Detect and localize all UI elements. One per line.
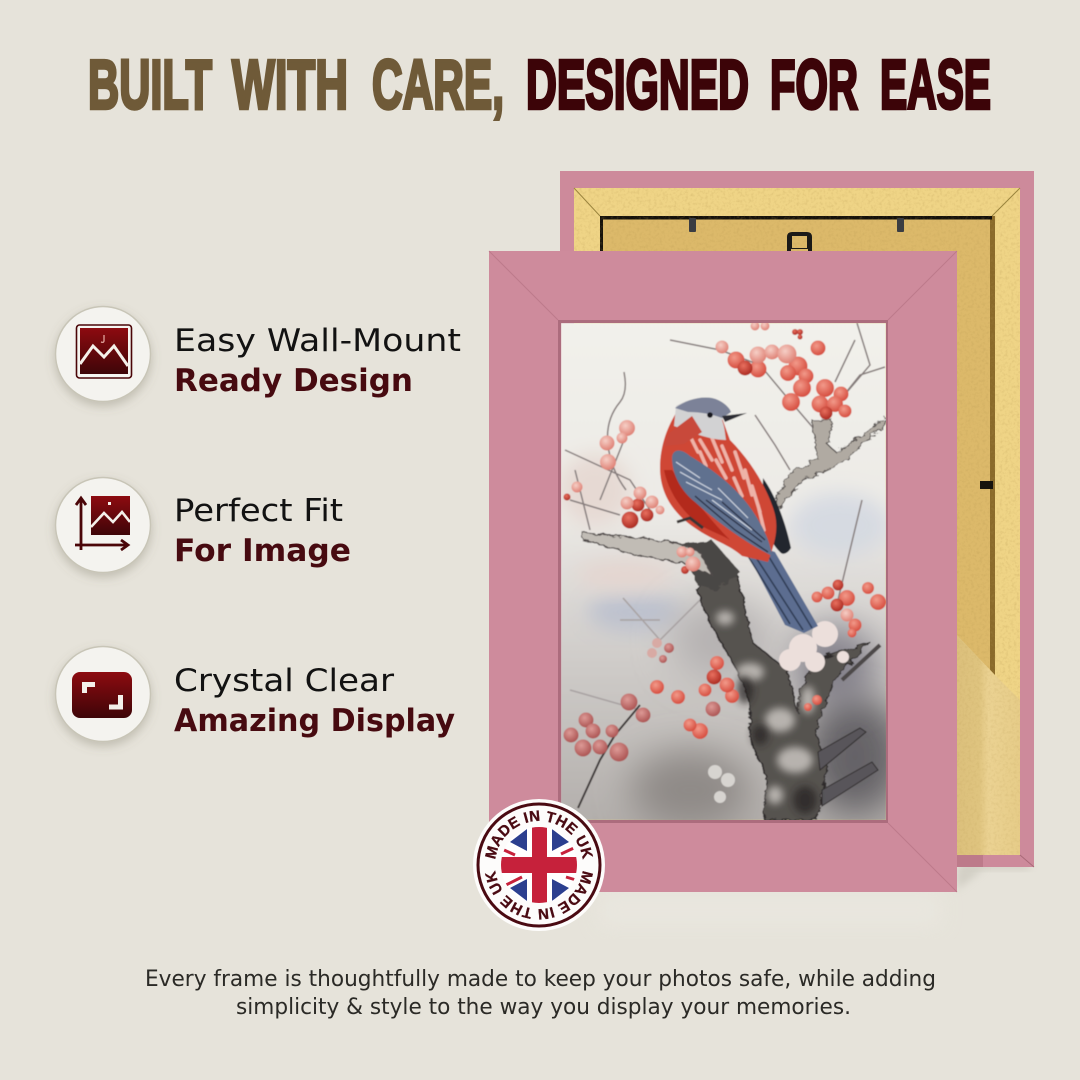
feature: crystal clear <box>56 646 455 742</box>
tree trunk and limbs <box>583 418 885 820</box>
icon: wall-mount picture <box>56 306 150 402</box>
mitre lines <box>489 251 957 892</box>
text: perfect fit <box>174 493 351 569</box>
text: perfect fit: Perfect Fit <box>174 493 343 529</box>
painting: bird on berry branch <box>559 322 905 830</box>
closing statement <box>145 966 936 1020</box>
text: crystal clear: Crystal Clear <box>174 663 394 699</box>
title: FOR <box>770 46 858 124</box>
text: easy wall-mount <box>174 323 461 399</box>
text: crystal clear: Amazing Display <box>174 703 455 739</box>
feature: perfect fit <box>56 478 351 572</box>
title: EASE <box>880 46 991 124</box>
closing statement: simplicity & style to the way you display your memories. <box>236 994 851 1020</box>
berries <box>564 322 886 762</box>
gold cardboard border <box>574 188 1020 855</box>
text: easy wall-mount: Easy Wall-Mount <box>174 323 461 359</box>
thin twigs <box>565 323 885 808</box>
union flag <box>500 826 578 904</box>
back of frame <box>560 171 1034 867</box>
badge text: MADE IN THE UK <box>485 810 594 860</box>
hanging tabs <box>689 218 904 232</box>
watercolour wash <box>559 323 905 830</box>
dark primaries <box>762 478 791 554</box>
back frame pink rim <box>560 171 1034 867</box>
title <box>88 46 991 124</box>
closing statement: Every frame is thoughtfully made to keep your photos safe, while adding <box>145 966 936 992</box>
icon: image with size arrows <box>56 478 150 572</box>
title: BUILT <box>88 46 212 124</box>
breast streaks <box>690 436 764 530</box>
tail <box>750 550 818 634</box>
badge: made in the UK <box>473 799 605 931</box>
title: WITH <box>232 46 348 124</box>
head <box>674 397 731 440</box>
title: DESIGNED <box>526 46 749 124</box>
icon: clear display <box>56 646 150 742</box>
text: easy wall-mount: Ready Design <box>174 363 413 399</box>
beak <box>722 413 747 422</box>
front frame <box>489 251 957 892</box>
backing board <box>600 216 992 686</box>
stand flap <box>957 635 1020 855</box>
pale blossoms <box>708 621 849 803</box>
hanger bracket <box>787 232 812 251</box>
text: perfect fit: For Image <box>174 533 351 569</box>
pink frame moulding <box>489 251 957 892</box>
floor shadow and reflection <box>600 862 1030 926</box>
bird claw <box>677 518 703 528</box>
inner lip <box>558 320 888 823</box>
badge: made in the UK: MADE IN THE UK <box>484 870 593 920</box>
red body <box>660 410 776 562</box>
wing <box>672 450 772 556</box>
title: CARE, <box>372 46 504 124</box>
feature: easy wall-mount <box>56 306 461 402</box>
text: crystal clear <box>174 663 455 739</box>
bird <box>660 397 818 633</box>
speckle texture <box>574 188 1020 855</box>
